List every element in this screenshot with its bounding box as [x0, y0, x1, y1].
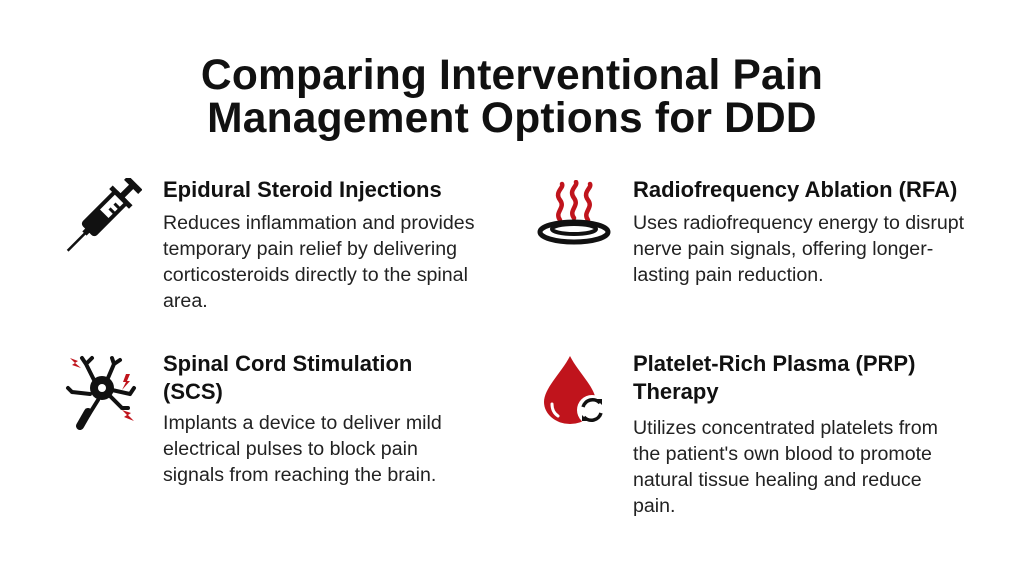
heading: RFA: Radiofrequency Ablation (RFA): [633, 177, 957, 202]
text: ESI: area.: [163, 290, 208, 312]
text: SCS: electrical pulses to block pain: [163, 438, 418, 460]
text: PRP: Utilizes concentrated platelets from: [633, 417, 938, 439]
title: [201, 52, 823, 142]
text: PRP: pain.: [633, 495, 676, 517]
text: ESI: temporary pain relief by delivering: [163, 238, 457, 260]
heading: PRP: Platelet-Rich Plasma (PRP): [633, 351, 915, 376]
text: RFA: Uses radiofrequency energy to disrupt: [633, 212, 964, 234]
icon: blood drop: [544, 356, 603, 424]
heading: PRP: Therapy: [633, 379, 719, 404]
heading: ESI: Epidural Steroid Injections: [163, 177, 442, 202]
heading: PRP: [633, 351, 915, 404]
text: SCS: signals from reaching the brain.: [163, 464, 436, 486]
text: PRP: natural tissue healing and reduce: [633, 469, 922, 491]
text: ESI: corticosteroids directly to the spinal: [163, 264, 468, 286]
text: SCS: Implants a device to deliver mild: [163, 412, 442, 434]
heading: SCS: Spinal Cord Stimulation: [163, 351, 412, 376]
icon: syringe: [66, 178, 142, 252]
text: PRP: [633, 417, 938, 517]
text: SCS: [163, 412, 442, 486]
icon: neuron: [66, 356, 136, 430]
text: RFA: nerve pain signals, offering longer-: [633, 238, 933, 260]
icon: heat: [538, 180, 610, 244]
title: Comparing Interventional Pain: [201, 52, 823, 99]
heading: SCS: [163, 351, 412, 404]
heading: SCS: (SCS): [163, 379, 223, 404]
text: RFA: lasting pain reduction.: [633, 264, 824, 286]
text: RFA: [633, 212, 964, 286]
text: ESI: Reduces inflammation and provides: [163, 212, 474, 234]
title: Management Options for DDD: [207, 95, 817, 142]
text: ESI: [163, 212, 474, 312]
text: PRP: the patient's own blood to promote: [633, 443, 932, 465]
